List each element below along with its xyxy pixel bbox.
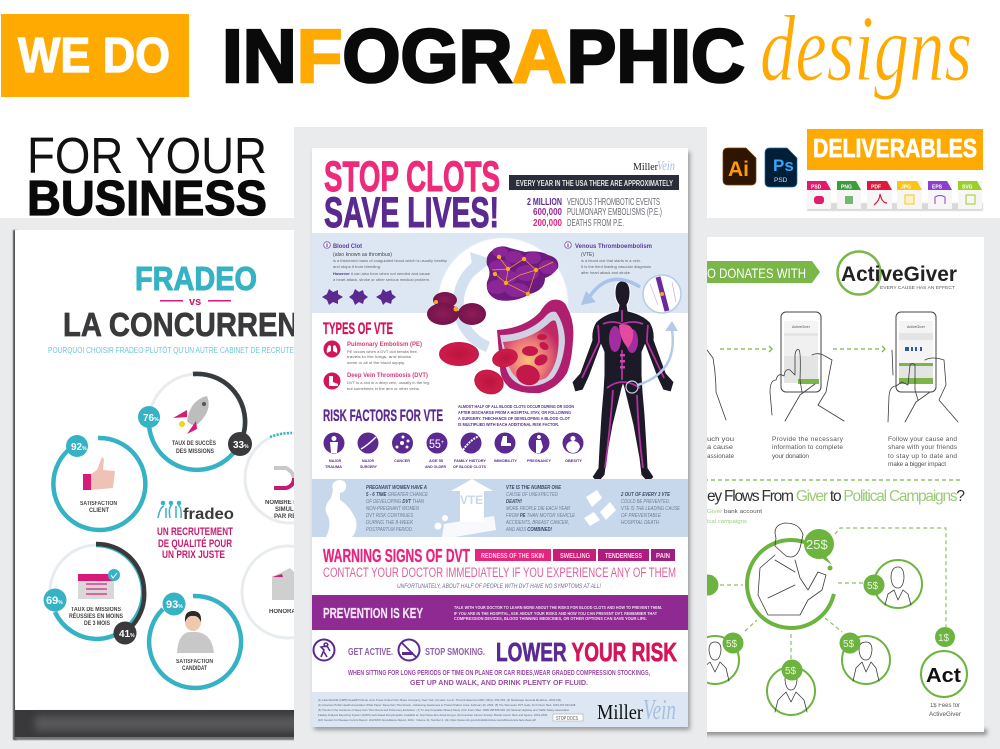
- subheading: for your business: [27, 127, 267, 226]
- icon: svg file: [958, 181, 982, 209]
- venous thromboembolism text: (VTE): [581, 252, 594, 258]
- ring: nombre de simulations: SIMUL: [275, 507, 294, 513]
- inset: vein: [643, 275, 681, 313]
- arrow: leg to inset: [638, 321, 678, 385]
- fact: vte number one: AND AIDS COMBINED!: [505, 527, 552, 533]
- risk factor labels: MAJOR: [329, 458, 341, 463]
- type: pulmonary embolism: PE occurs when a DVT clot breaks free,: [347, 350, 418, 354]
- green banner: O DONATES WITH: [707, 265, 806, 281]
- icon: immobility: [494, 432, 516, 454]
- caption: step three: Follow your cause and: [888, 436, 957, 443]
- subheading: for your business: FOR YOUR: [27, 127, 267, 184]
- warning sign tags: SWELLING: [560, 553, 590, 560]
- fact: pregnant women: NON-PREGNANT WOMEN: [366, 506, 419, 512]
- icon: eps file: EPS: [932, 184, 943, 190]
- vte up arrow: [434, 479, 496, 537]
- icon: info: [565, 242, 571, 248]
- label: satisfaction client: CLIENT: [89, 508, 109, 514]
- type: deep vein thrombosis: [324, 372, 430, 391]
- risk factor labels: AND OLDER: [425, 464, 446, 469]
- title: stop clots save lives: STOP CLOTS: [324, 153, 500, 201]
- grey panel behind center poster: [294, 127, 707, 749]
- fact: vte number one: VTE IS THE NUMBER ONE: [506, 485, 561, 491]
- small ring: bottom: [767, 660, 815, 715]
- icon: thumbs up: [83, 457, 115, 490]
- small ring: lower right: [840, 632, 890, 684]
- panel: fradeo poster: [13, 230, 348, 740]
- ring: satisfaction candidat: [149, 592, 241, 688]
- small ring: right: 5$: [867, 581, 879, 592]
- logo: miller vein small: Vein: [657, 159, 675, 174]
- stop the clot badge: [553, 714, 583, 722]
- fact: preventable: 2 OUT OF EVERY 3 VTE: [620, 492, 670, 498]
- label: taux de missions: RÉUSSIES EN MOINS: [69, 612, 123, 620]
- type: pulmonary embolism: some or all of the blood supply.: [347, 361, 405, 365]
- badge 92: 92%: [71, 442, 87, 453]
- icon: stop smoking: [398, 640, 420, 660]
- illustration: dark blood cells: [427, 292, 486, 325]
- hands: [770, 350, 844, 421]
- caption: step three: to stay up to date and: [888, 453, 957, 460]
- blood clot text: [324, 242, 447, 282]
- prevention band: COMPRESSION DEVICES, BLOOD THINNING MEDICINES, OR OTHER OPTIONS CAN SAVE YOUR LIFE.: [454, 616, 647, 621]
- warning sign tags: PAIN: [656, 553, 670, 560]
- label: taux de missions: DE 3 MOIS: [84, 621, 110, 627]
- icon: get active: [314, 640, 334, 660]
- compression advice: GET UP AND WALK, AND DRINK PLENTY OF FLUID.: [410, 678, 588, 687]
- heading: types of vte: TYPES OF VTE: [323, 319, 393, 338]
- icon: calendar: [78, 569, 120, 599]
- file type icons: [807, 181, 983, 211]
- label: satisfaction client: SATISFACTION: [80, 501, 117, 507]
- type: deep vein thrombosis: Deep Vein Thrombosis (DVT): [347, 372, 428, 379]
- contact doctor line: CONTACT YOUR DOCTOR IMMEDIATELY IF YOU EXPERIENCE ANY OF THEM: [323, 565, 676, 580]
- references: (6) Trends in the Incidence of Deep-Vein Thrombosis and Pulmonary Embolism. (7) Tri-Hop Population Based Study. Arch Intern Med. 1998;158:585-593. (8) National Highway and Traffic Safety Association.: [318, 708, 570, 712]
- fact: pregnant women: DURING THE 8-WEEK: [366, 520, 413, 526]
- fees label: 1$ Fees for: [930, 703, 960, 709]
- big giver ring: [747, 523, 835, 628]
- type: deep vein thrombosis: DVT is a clot in a deep vein, usually in the leg,: [347, 381, 430, 385]
- white circle: [438, 238, 568, 368]
- badge 69: 69%: [46, 595, 63, 607]
- icon: jpg file: JPG: [901, 184, 911, 190]
- fact: vte number one: CAUSE OF UNEXPECTED: [506, 492, 558, 498]
- references: [318, 698, 576, 722]
- circular arrow: [458, 252, 494, 347]
- icon: age 55: +: [441, 440, 444, 446]
- icon: age 55: [426, 432, 448, 454]
- icon: photoshop: [765, 148, 797, 187]
- ring: honoraires: HONORAI: [269, 609, 298, 615]
- risk paragraph: [458, 404, 574, 427]
- risk factor labels: OBESITY: [565, 458, 582, 463]
- activegiver logo: EVERY CAUSE HAS AN EFFECT: [880, 285, 955, 290]
- ring: nombre de simulations: PAR RE: [274, 514, 296, 520]
- risk factor labels: FAMILY HISTORY: [454, 458, 486, 463]
- hands: [888, 350, 958, 422]
- illustration: phone step two: ActiveGiver: [792, 325, 811, 329]
- icon: foot: [324, 372, 340, 390]
- icon: age 55: 55: [429, 437, 442, 451]
- illustration: phone step three: [888, 312, 958, 422]
- risk paragraph: IS MULTIPLIED WITH EACH ADDITIONAL RISK FACTOR.: [458, 422, 559, 427]
- label: satisfaction candidat: CANDIDAT: [182, 666, 207, 672]
- label: satisfaction client: [80, 501, 117, 514]
- blood clot text: is a thickened mass of coagulated blood which is usually healthy: [333, 259, 447, 263]
- ring: satisfaction client: [53, 435, 145, 530]
- fact: pregnant women: OF DEVELOPING DVT THAN: [366, 499, 424, 505]
- arrow: body to vein inset: [581, 279, 640, 305]
- ring: taux de succes: [138, 374, 252, 470]
- caption: step two: information to complete: [772, 444, 843, 451]
- fact: preventable: OF PREVENTABLE: [621, 513, 661, 519]
- type: pulmonary embolism: [324, 340, 422, 365]
- panel: stop clots poster: [312, 148, 688, 727]
- center poster shadow: [314, 152, 690, 730]
- prevention band: IF YOU ARE IN THE HOSPITAL, ASK ABOUT YOUR RISKS AND HOW YOU CAN PREVENT DVT. REMEMBER THAT: [454, 611, 657, 616]
- icon: pdf file: PDF: [871, 184, 881, 190]
- usa stats bar: [509, 175, 679, 190]
- icon: illustrator: Ai: [728, 158, 749, 181]
- one dollar bubble: 1$: [938, 633, 950, 644]
- fact: preventable: [620, 492, 680, 526]
- illustration: blood vessel: [497, 300, 573, 393]
- lower your risk row: [314, 637, 677, 667]
- venous thromboembolism text: [565, 242, 652, 275]
- fradeo logo and slogan: DE QUALITÉ POUR: [158, 537, 232, 550]
- type: pulmonary embolism: travels to the lungs, and blocks: [347, 355, 411, 359]
- stop the clot badge: STOP DOCS: [556, 716, 578, 722]
- icon: virus three: [376, 289, 396, 305]
- caption: step one: uch you: [707, 436, 734, 443]
- badge 76: 76%: [143, 413, 159, 424]
- caption: step one: a cause: [707, 444, 733, 451]
- fees label: [929, 703, 961, 718]
- usa stats: DEATHS FROM P.E.: [567, 218, 624, 229]
- icon: photoshop: PSD: [774, 177, 788, 184]
- caption: step three: [888, 436, 958, 468]
- logo: miller vein small: Miller: [633, 162, 659, 173]
- icon: psd file: [807, 181, 831, 209]
- vte up arrow: VTE: [460, 493, 483, 507]
- fact: pregnant women: DVT RISK CONTINUES: [366, 513, 413, 519]
- venous thromboembolism text: is a blood clot that starts in a vein.: [581, 259, 641, 263]
- step arrows: [720, 346, 885, 352]
- icon: eps file: [928, 181, 952, 209]
- illustration: phone step two: [770, 312, 844, 421]
- logo: miller vein small: [633, 159, 675, 174]
- label: get active: GET ACTIVE.: [348, 646, 393, 658]
- deliverables banner: [807, 129, 983, 170]
- icon: major surgery: [358, 432, 378, 454]
- illustration: phone step three: ActiveGiver: [907, 325, 926, 329]
- prevention band: PREVENTION IS KEY: [323, 606, 423, 622]
- references: Fatality Analysis Reporting System (FARS) web-based Encyclopedia. Available at: http://www-fars.nhtsa.dot.gov. (9) American Cancer Society. Breast cancer facts and figures, 2001-2002.: [318, 713, 548, 717]
- references: (1) Lilienfeld DE (1985) Deadfill Kirlman Jonn Press United York Share Company, New York. (2) Hele J et al. Thromb Haemost 2001; 86(1): 452-463. (3) Medscape General Medicine, 2004;6(3).: [318, 698, 562, 702]
- risk factor labels: IMMOBILITY: [494, 458, 517, 463]
- vs divider: vs: [189, 296, 201, 308]
- hand partial: step one: [707, 350, 726, 420]
- fradeo logo and slogan: [157, 502, 234, 561]
- symptoms note: UNFORTUNATELY, ABOUT HALF OF PEOPLE WITH DVT HAVE NO SYMPTOMS AT ALL!: [397, 583, 601, 590]
- left bubble: [698, 574, 718, 596]
- heading: lower your risk: LOWER YOUR RISK: [496, 637, 677, 667]
- caption: step three: share with your friends: [888, 444, 958, 451]
- icon: family history: [460, 432, 482, 454]
- icon: jpg file: [897, 181, 922, 209]
- fradeo logo and slogan: fradeo: [183, 506, 234, 523]
- risk factor labels: PREGNANCY: [527, 458, 551, 463]
- money flow note: ical campaigns: [707, 519, 747, 525]
- usa stats bar: EVERY YEAR IN THE USA THERE ARE APPROXIMATELY: [516, 179, 673, 188]
- label: stop smoking: STOP SMOKING.: [425, 646, 485, 658]
- icon: obesity: [562, 432, 584, 454]
- references: (4) American Public Health Association White Paper: Deep-Vein Thrombosis - Advancing Awareness to Protect Patient Lives, February 26, 2003. (5) The Worcester DVT study. Arch Intern Med. 1991;151:933-938.: [318, 703, 576, 707]
- icon: photoshop: Ps: [773, 156, 794, 175]
- fact: vte number one: ACCIDENTS, BREAST CANCER,: [505, 520, 569, 526]
- badge 93: 93%: [166, 599, 183, 611]
- label: taux de missions: [69, 607, 123, 627]
- activegiver logo: ActiveGiver: [841, 263, 957, 286]
- illustration: red blood cells: [439, 342, 520, 398]
- title: stop clots save lives: SAVE LIVES!: [324, 189, 499, 237]
- icon: png file: PNG: [841, 184, 852, 190]
- venous thromboembolism text: It is the third leading vascular diagnosis: [581, 265, 651, 269]
- prevention band: [312, 595, 688, 630]
- pale blue band: [312, 233, 688, 313]
- icon: pdf file: [867, 181, 892, 209]
- small ring: lower left: 5$: [726, 639, 738, 650]
- risk factor labels: [325, 458, 582, 469]
- blood clot text: and stops it from bleeding.: [333, 265, 381, 269]
- fact: preventable: COULD BE PREVENTED.: [621, 499, 670, 505]
- fact: vte number one: DEATH!: [506, 499, 522, 505]
- icon: major trauma: [324, 432, 344, 454]
- risk factor labels: AGE 55: [429, 458, 444, 463]
- risk factor labels: SURGERY: [360, 464, 377, 469]
- fact: vte number one: [505, 485, 575, 533]
- badge 33: 33%: [233, 440, 249, 451]
- caption: step two: your donation: [772, 453, 809, 460]
- small ring: lower right: 5$: [843, 639, 855, 650]
- prevention band: TALK WITH YOUR DOCTOR TO LEARN MORE ABOUT THE RISKS FOR BLOOD CLOTS AND HOW TO PREVENT THEM.: [454, 605, 662, 610]
- label: taux de succes: DES MISSIONS: [176, 449, 214, 455]
- poster footer: [312, 692, 688, 727]
- small ring: bottom: 5$: [785, 666, 797, 677]
- risk paragraph: ALMOST HALF OF ALL BLOOD CLOTS OCCUR DURING OR SOON: [458, 404, 574, 409]
- blood clot text: a heart attack, stroke or other serious medical problem.: [333, 278, 430, 282]
- icon: psd file: PSD: [811, 184, 822, 190]
- fact: preventable: VTE IS THE LEADING CAUSE: [621, 506, 680, 512]
- caption: step one: assionate: [707, 453, 734, 460]
- person on phone: [758, 523, 826, 615]
- venous thromboembolism text: Venous Thromboembolism: [575, 243, 652, 250]
- type: deep vein thrombosis: but sometimes in the arm or other veins.: [347, 387, 420, 391]
- icon: virus one: [322, 289, 343, 305]
- risk factor labels: TRAUMA: [325, 464, 342, 469]
- icons: clot effects: [322, 289, 396, 305]
- badge 41: 41%: [119, 629, 135, 640]
- compression advice: WHEN SITTING FOR LONG PERIODS OF TIME ON PLANE OR CAR RIDES,WEAR GRADED COMPRESSION STOCKINGS,: [348, 670, 650, 677]
- fradeo logo and slogan: UN RECRUTEMENT: [157, 526, 233, 538]
- green banner: [690, 261, 820, 283]
- icon: info: [324, 242, 330, 248]
- ring: nombre de simulations: [245, 433, 335, 523]
- activegiver mini logo: [921, 651, 967, 697]
- header: we do badge: [1, 14, 189, 97]
- fact: pregnant women: [366, 485, 428, 533]
- money flow heading: ey Flows From Giver to Political Campaigns?: [707, 488, 965, 505]
- label: satisfaction candidat: SATISFACTION: [176, 659, 213, 665]
- pregnant silhouette: [326, 480, 356, 537]
- icon: virus two: [349, 289, 368, 305]
- ring: honoraires: [242, 546, 334, 638]
- subheading: for your business: BUSINESS: [27, 172, 267, 226]
- title: stop clots save lives: [324, 153, 500, 237]
- logo: miller vein large: Vein: [643, 695, 676, 726]
- label: taux de succes: TAUX DE SUCCÈS: [172, 439, 216, 447]
- warning sign tags: [475, 549, 675, 561]
- caption: step three: make a bigger impact: [888, 461, 946, 468]
- logo: miller vein large: Miller: [597, 700, 643, 724]
- ring: nombre de simulations: NOMBRE D: [265, 500, 298, 506]
- blood clot text: However it can also form when not needed and cause: [333, 272, 430, 276]
- usa stats: 200,000: [533, 218, 562, 229]
- usa stats: PULMONARY EMBOLISMS (P.E.): [567, 207, 662, 218]
- fees label: ActiveGiver: [929, 712, 961, 718]
- caption: step one: [707, 436, 734, 460]
- grey backdrop: [0, 218, 1000, 749]
- fradeo heading: FRADEO: [135, 260, 257, 297]
- one dollar bubble: [935, 627, 955, 647]
- fact: pregnant women: POSTPARTUM PERIOD.: [366, 527, 413, 533]
- vs divider: [160, 296, 231, 308]
- illustration: blood clot: [487, 246, 558, 301]
- type: pulmonary embolism: Pulmonary Embolism (PE): [347, 341, 422, 348]
- activegiver mini logo: Act: [926, 665, 961, 687]
- fact: vte number one: FROM PE THAN MOTOR VEHICLE: [506, 513, 575, 519]
- fact: pregnant women: PREGNANT WOMEN HAVE A: [366, 485, 427, 491]
- activegiver logo: [838, 252, 957, 294]
- small ring: right: [864, 560, 922, 608]
- heading: warning signs: WARNING SIGNS OF DVT: [323, 546, 470, 566]
- label: taux de missions: TAUX DE MISSIONS: [71, 607, 121, 613]
- icons: check marks: [584, 490, 616, 526]
- warning sign tags: REDNESS OF THE SKIN: [481, 553, 544, 560]
- icon: lungs: [324, 340, 340, 358]
- logo: miller vein large: [597, 695, 676, 726]
- blood clot text: Blood Clot: [333, 243, 363, 250]
- fact: vte number one: MORE PEOPLE DIE EACH YEAR: [506, 506, 570, 512]
- fact: pregnant women: 5 - 6 TIME GREATER CHANCE: [366, 492, 428, 498]
- icon: candidate: [177, 611, 214, 653]
- usa stats: [527, 197, 662, 229]
- risk factor labels: CANCER: [394, 458, 410, 463]
- caption: step two: Provide the necessary: [772, 436, 844, 443]
- fradeo footer bar: [15, 710, 300, 737]
- risk paragraph: A SURGERY. THECHANCE OF DEVELOPING A BLOOD CLOT: [458, 416, 570, 421]
- ring: taux de missions: [44, 544, 144, 644]
- 25 dollars bubble: 25$: [806, 537, 828, 552]
- panel: activegiver poster: [690, 237, 987, 735]
- caption: step two: [772, 436, 844, 460]
- blood clot text: (also known as thrombus): [333, 252, 392, 258]
- label: satisfaction candidat: [176, 659, 213, 672]
- fact: preventable: HOSPITAL DEATH: [621, 520, 659, 526]
- usa stats: 2 MILLION: [527, 197, 562, 208]
- compression advice: [348, 670, 650, 687]
- icon: svg file: SVG: [962, 184, 973, 190]
- warning sign tags: TENDERNESS: [605, 553, 642, 560]
- money flow note: Giver bank account: [707, 509, 763, 515]
- blue facts band: [312, 479, 688, 537]
- references: (10) Centers for Disease Control Report. HIV/AIDS Surveillance Report, 2001 : Volume 13, Number 2. (11) https://www.cdc.gov/ncbddd/dvt/documents/blood-clots-fact-sheet.pdf: [318, 718, 536, 722]
- icon: rocket: [173, 396, 209, 434]
- icon: png file: [837, 181, 861, 209]
- fradeo logo and slogan: UN PRIX JUSTE: [162, 549, 225, 561]
- venous thromboembolism text: after heart attack and stroke.: [581, 271, 631, 275]
- label: taux de succes: [172, 439, 216, 455]
- risk factor icons: [324, 432, 584, 454]
- icon: people: [158, 502, 181, 518]
- connector lines: [706, 528, 946, 660]
- header: we do badge: WE DO: [18, 29, 170, 83]
- header: infographic title: INFOGRAPHIC: [222, 14, 745, 98]
- risk factor labels: OF BLOOD CLOTS: [453, 464, 486, 469]
- money flow note: [707, 509, 763, 525]
- usa stats: VENOUS THROMBOTIC EVENTS: [567, 197, 660, 208]
- usa stats: 600,000: [533, 207, 562, 218]
- icon: cancer: [392, 432, 413, 454]
- heading: risk factors: RISK FACTORS FOR VTE: [323, 406, 443, 425]
- software icons: [723, 148, 797, 187]
- icon: pregnancy: [528, 432, 550, 454]
- fradeo subtitle: POURQUOI CHOISIR FRADEO PLUTÔT QU'UN AUTRE CABINET DE RECRUTEMENT FRANÇAIS: [48, 346, 348, 355]
- risk factor labels: MAJOR: [362, 458, 374, 463]
- small ring: lower left: [691, 632, 744, 684]
- illustration: body: [572, 281, 674, 483]
- la concurrence heading: LA CONCURRENCE: [63, 306, 339, 343]
- risk paragraph: AFTER DISCHARGE FROM A HOSPITAL STAY, OR FOLLOWING: [458, 410, 571, 415]
